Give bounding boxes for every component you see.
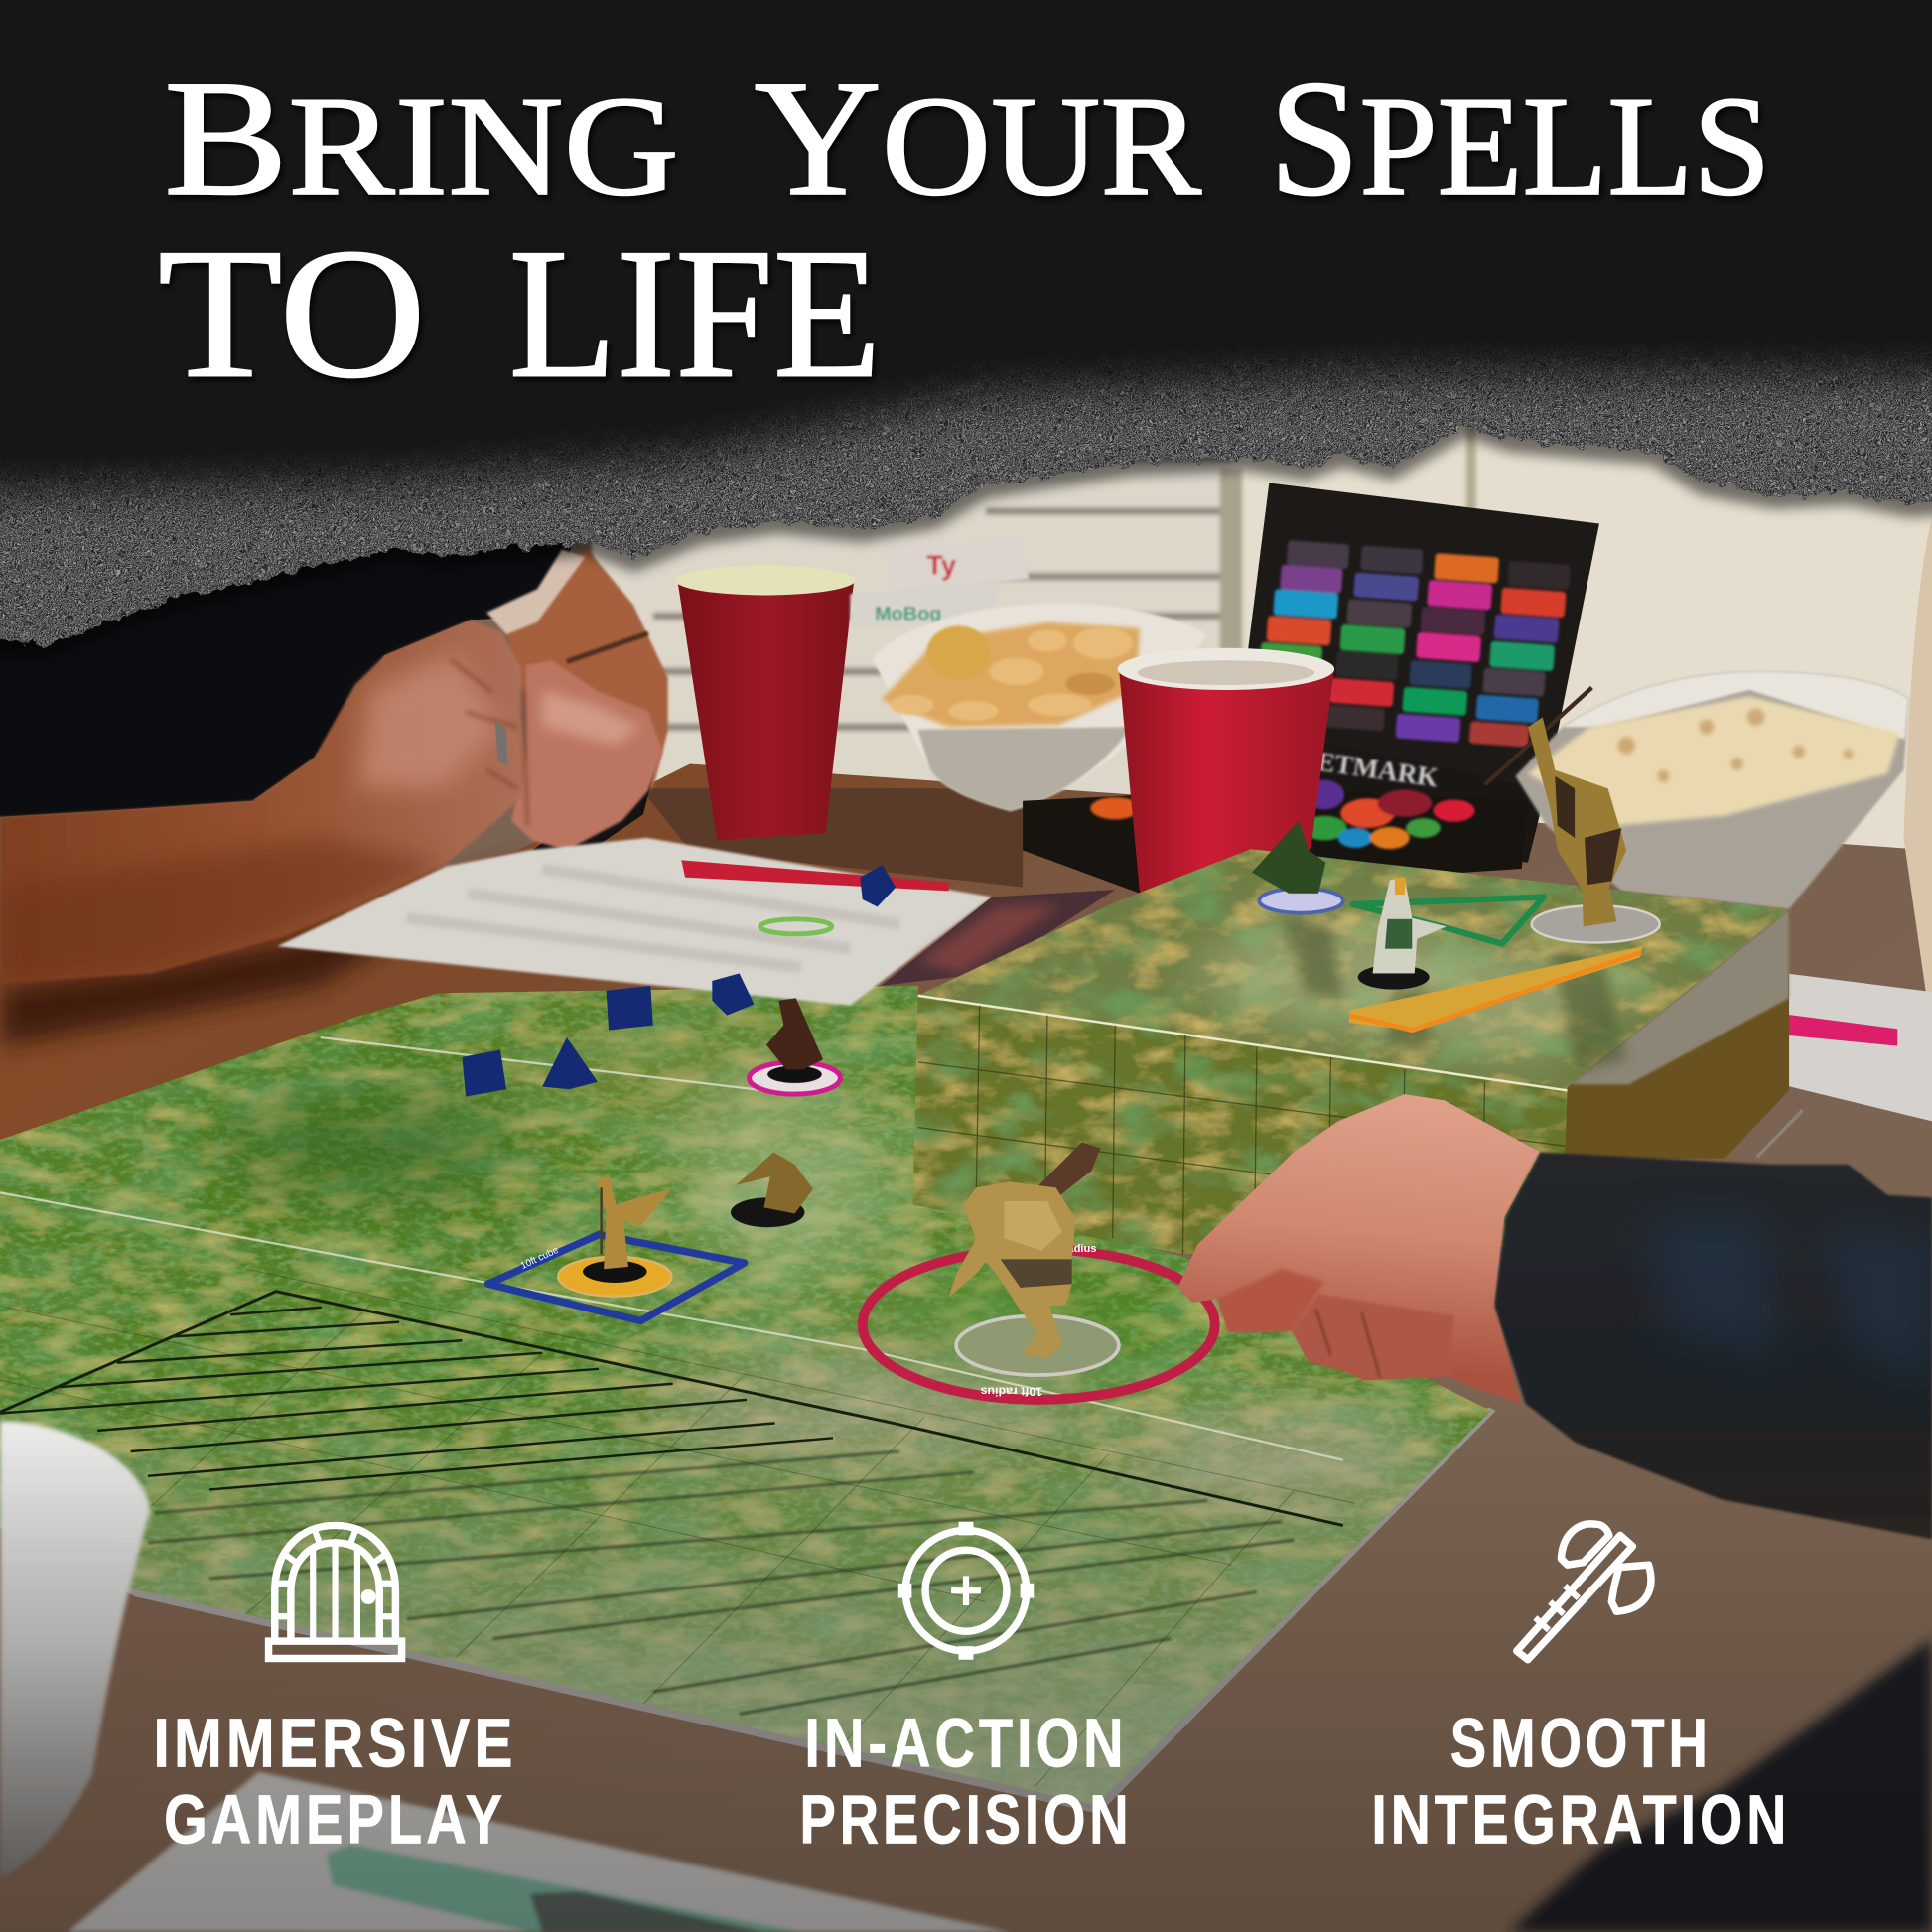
cardboard edge at right [1903,517,1932,1035]
big ogre with spear [1484,688,1660,942]
upper arm [506,550,668,788]
red radius ring [863,1243,1215,1400]
left player's shirt and arms [0,530,668,983]
feature: smooth integration [1371,1524,1790,1859]
bowl of chips [873,604,1207,811]
icon: battle axe [1517,1524,1651,1660]
grid and hatching [0,1037,1355,1787]
label: IN-ACTION [804,1705,1128,1782]
wall [1232,369,1932,888]
title line two: TO [158,210,426,417]
red radius ring: 10ft radius [980,1384,1042,1398]
miniatures on the mat [487,998,1215,1400]
box top [918,849,1789,1090]
tray of coloured rings [1023,780,1528,894]
window blinds [592,407,1476,801]
gamer's right hand and sleeve [1177,1094,1932,1539]
label: GAMEPLAY [164,1781,506,1859]
gold ring mini [558,1176,671,1297]
finger shadows [450,659,527,826]
red cup, back [675,566,855,840]
lower fade [0,1421,1475,1805]
battle mat [0,986,1601,1814]
red radius ring: radius [1063,1243,1097,1255]
terrain patches [0,1035,1601,1811]
ring [495,721,507,766]
tear shadow [0,0,1932,658]
dice [462,865,896,1097]
mat printed surface [0,986,1491,1805]
pink based mini [750,998,840,1094]
title line one [164,47,1770,229]
title line two [158,210,881,417]
label: IMMERSIVE [154,1705,517,1782]
feature: in-action precision [799,1522,1133,1859]
torn paper sheet [0,0,1932,648]
ogre [949,1142,1100,1358]
blue square template: 10ft cube [519,1245,561,1272]
white cloaked figure [1358,878,1447,990]
hand two [511,660,663,850]
white cup, lower left [0,1421,150,1879]
box front [913,996,1568,1254]
game box with coloured tiles: ETMARK [1315,747,1441,793]
icon: arched door [269,1525,402,1658]
label: PRECISION [799,1781,1133,1859]
title [158,47,1770,417]
title line two: LIFE [509,210,881,417]
right side paper and pink pen [1780,973,1932,1121]
name tents [850,536,1029,628]
translucent templates on the box [1349,897,1642,1031]
box side [1565,909,1789,1159]
feature: immersive gameplay [154,1525,517,1859]
lower photo darkening [0,1392,1932,1932]
torn paper header [0,0,1932,648]
spell tiles [1255,539,1571,750]
shirt cuff [486,550,586,634]
title line one: BRING [164,47,679,229]
sheet of paper and pen [277,838,1115,1006]
terrain box [913,849,1789,1257]
grey mat edge [0,1407,1496,1814]
hand [1177,1094,1540,1404]
base of ogre [956,1315,1119,1375]
miniatures on the box [1252,688,1660,990]
bowl of popcorn [1516,671,1908,909]
icon: target reticle [898,1522,1034,1660]
title line one: YOUR [755,47,1201,229]
black shirt [0,530,579,817]
notebook and green pen, bottom [68,1772,1011,1932]
hand one and forearm [0,620,526,983]
small green figure [1252,821,1343,913]
shield mini [731,1152,813,1227]
blue square template [487,1235,745,1320]
map tail line [1757,1110,1803,1157]
name tents: Ty [926,549,957,580]
label: INTEGRATION [1371,1781,1790,1859]
red cup, front [1118,648,1334,894]
name tents: MoBog [875,603,941,624]
sleeve under hand [532,758,658,860]
title line one: SPELLS [1269,47,1770,229]
table surface [0,763,1932,1932]
reflections on top [1282,918,1626,1072]
label: SMOOTH [1450,1705,1712,1782]
dark sleeve, bottom right [1509,1639,1932,1932]
bracelet [567,633,648,661]
game box with coloured tiles [1238,483,1599,863]
sleeve [1494,1152,1932,1539]
